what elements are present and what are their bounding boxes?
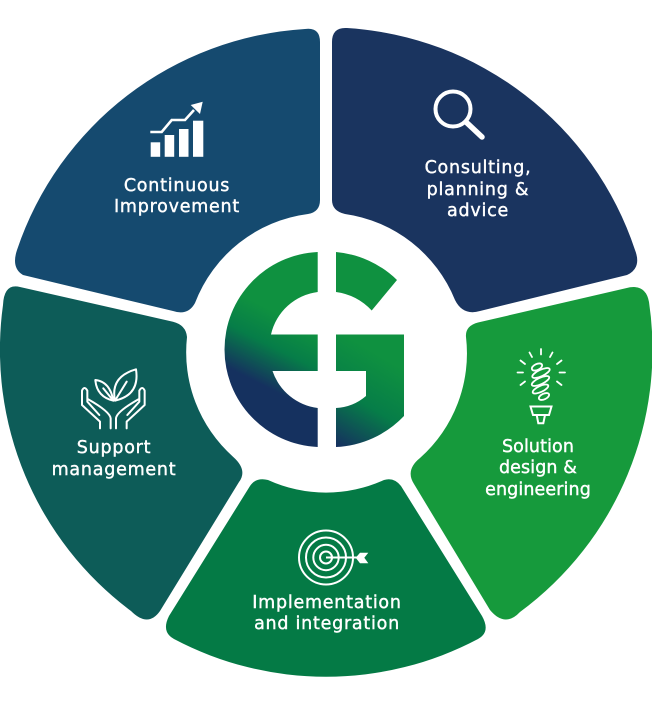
label: support management: management (52, 460, 176, 480)
label: solution design: engineering (485, 480, 591, 500)
icon: hands and leaves (82, 369, 145, 428)
label: continuous improvement: Continuous (124, 176, 230, 196)
panel: continuous improvement (15, 29, 320, 312)
label: implementation: and integration (254, 614, 400, 634)
label: solution design: design & (499, 458, 577, 478)
label: continuous improvement: Improvement (114, 197, 240, 217)
icon: target (299, 530, 368, 584)
label: consulting: advice (447, 201, 509, 221)
label: solution design: Solution (502, 437, 574, 457)
label: implementation: Implementation (252, 593, 402, 613)
label: consulting: Consulting, (425, 158, 531, 178)
panel: consulting (332, 28, 637, 312)
label: consulting: planning & (427, 180, 529, 200)
icon: magnifier (436, 92, 482, 137)
logo (225, 252, 404, 447)
panel: implementation (166, 479, 486, 677)
panel: solution design (411, 287, 652, 620)
panel: support management (0, 286, 242, 620)
label: support management: Support (77, 438, 151, 458)
icon: light bulb (518, 349, 565, 423)
icon: rising chart (150, 102, 203, 157)
